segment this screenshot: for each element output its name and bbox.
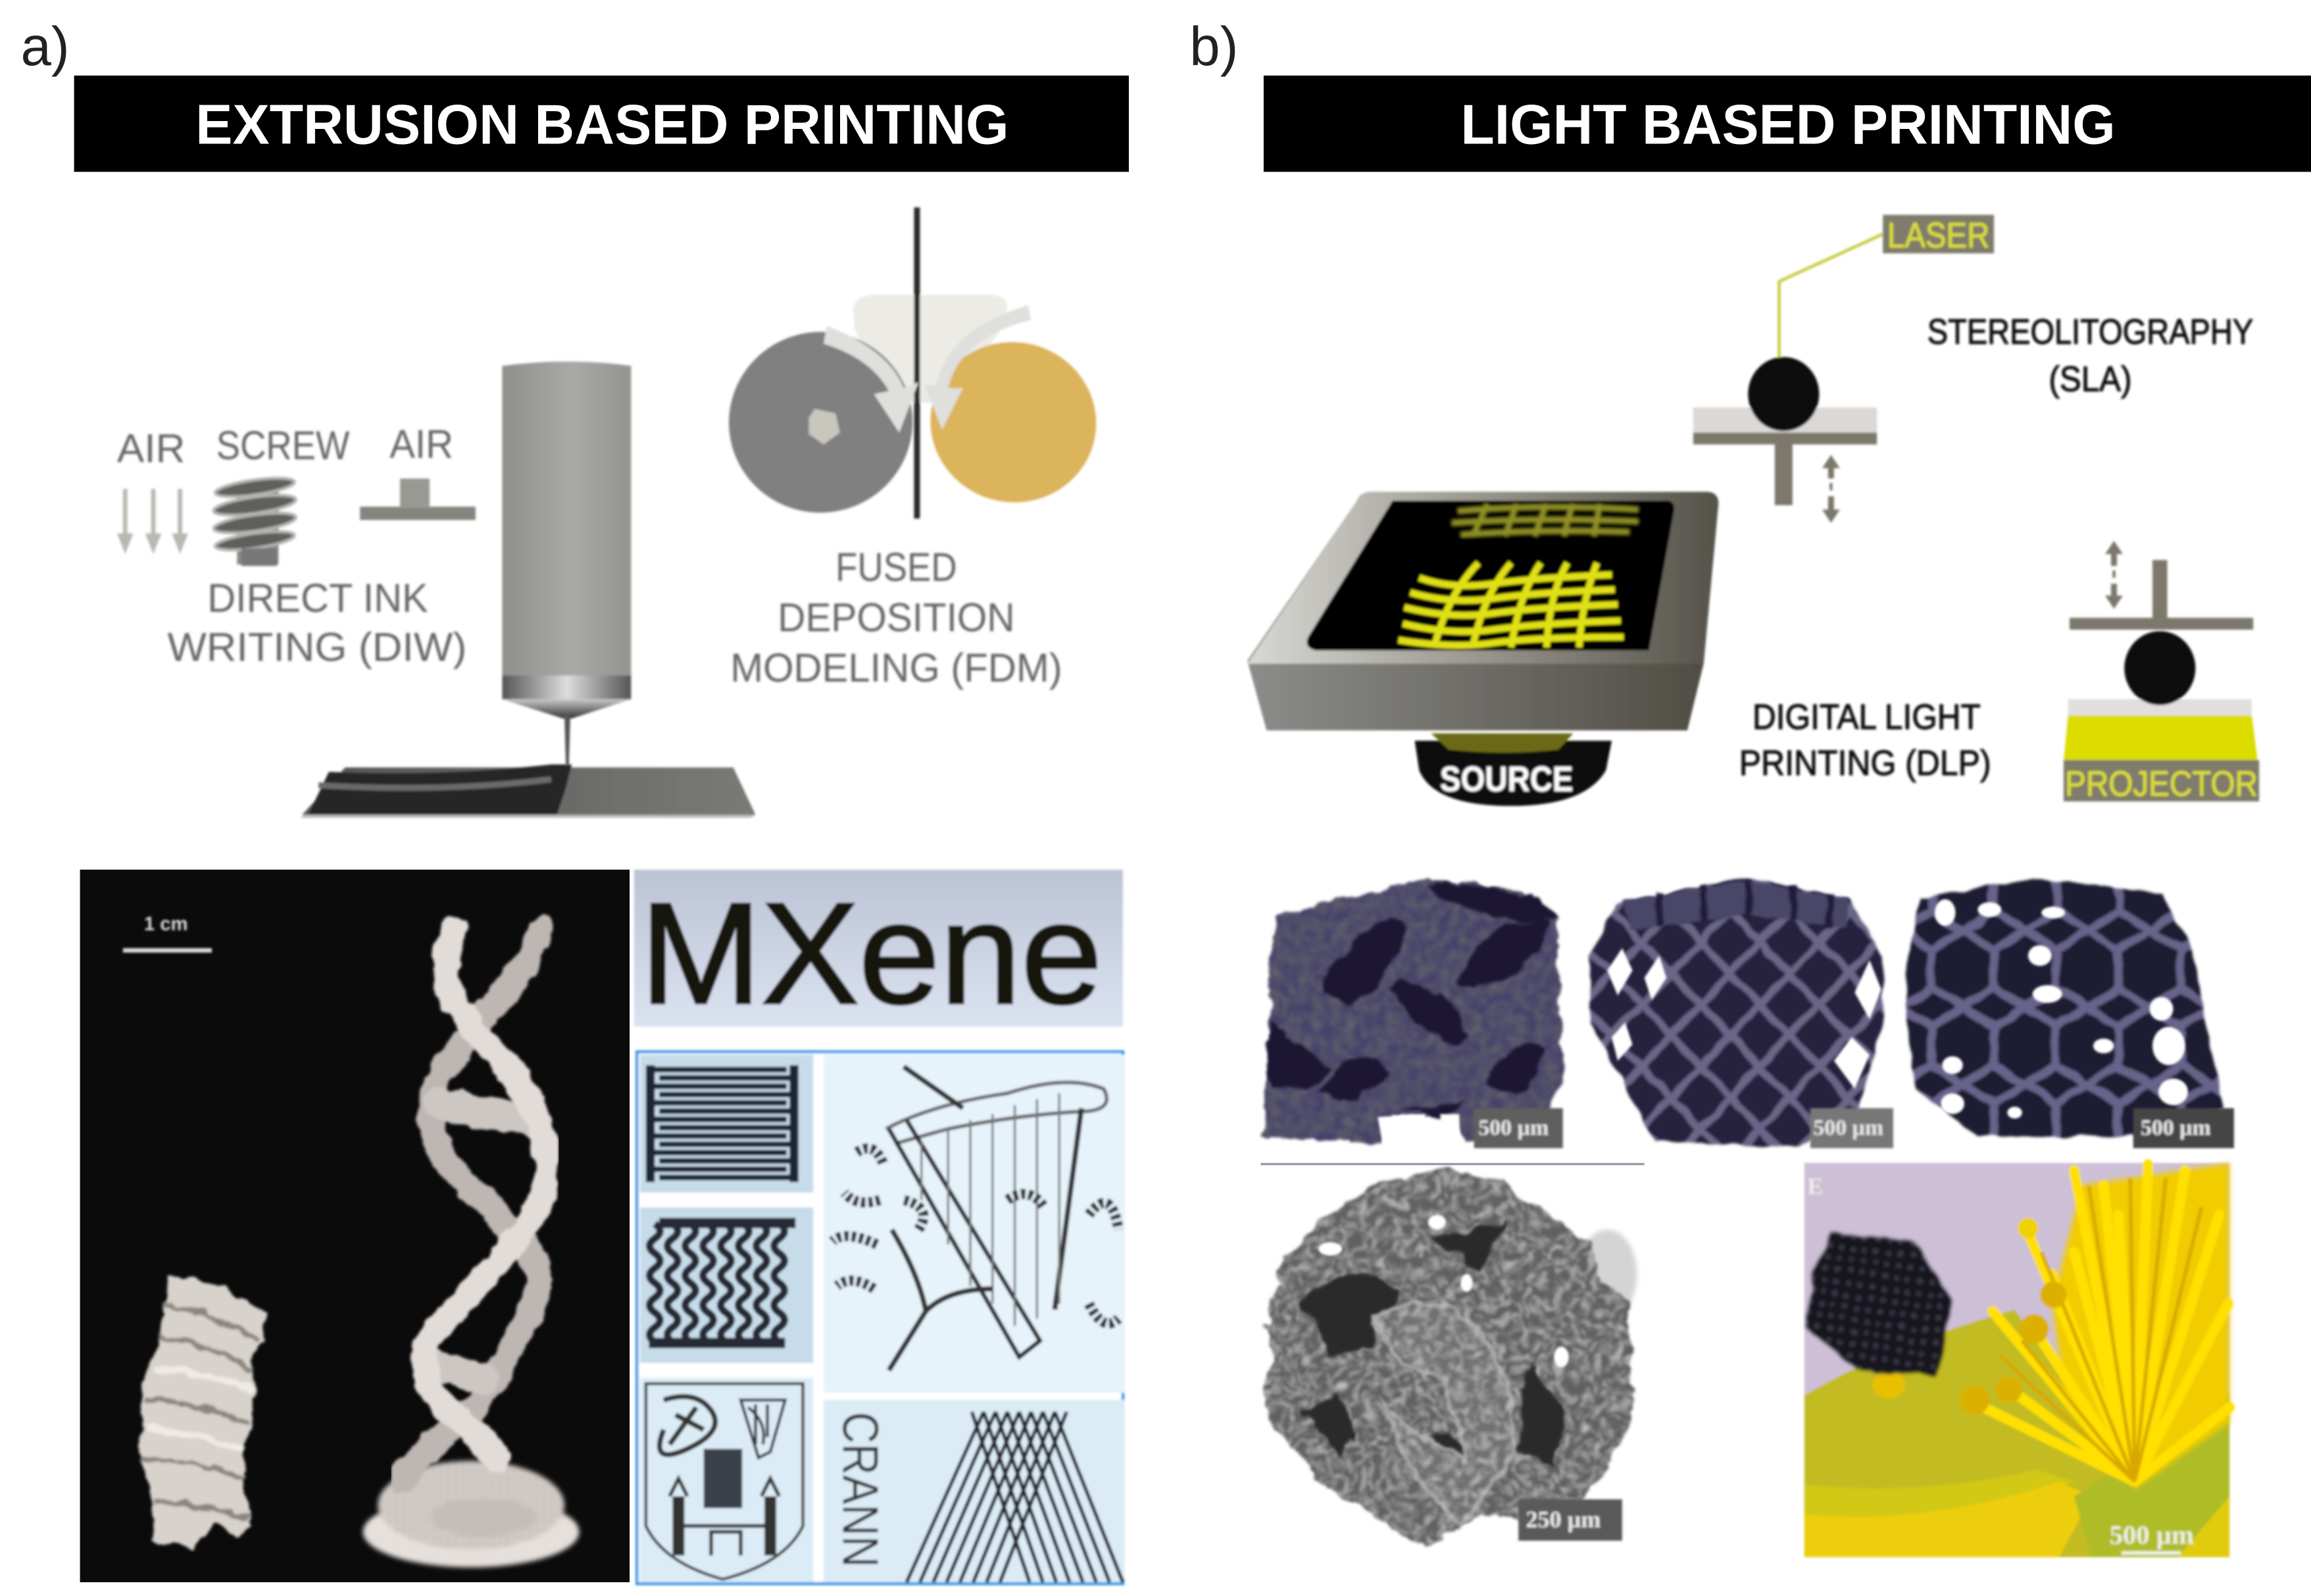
scale label: 500 µm <box>1810 1108 1893 1148</box>
label: direct ink writing: DIRECT INK <box>207 576 428 620</box>
micrograph: diamond lattice <box>1591 877 1893 1148</box>
icon: print plate with ink <box>301 764 755 818</box>
icon: resin vat <box>1247 492 1718 730</box>
panel: extrusion diagram <box>117 207 1111 818</box>
label: fused deposition modeling: MODELING (FDM) <box>730 645 1062 690</box>
scale label: 500 µm: 500 µm <box>1478 1116 1549 1140</box>
icon: anthers <box>1872 1218 2066 1415</box>
shape: background haze <box>1578 1230 1637 1318</box>
heading: extrusion based printing <box>74 76 1129 172</box>
photo: printed dna helix and vertebra <box>80 870 630 1582</box>
shape: gyroid pores <box>1271 886 1560 1118</box>
icon: reflected yellow grid <box>1452 504 1639 536</box>
label: digital light printing: DIGITAL LIGHT <box>1752 697 1981 737</box>
label: digital light printing <box>1739 697 1991 783</box>
panel: light based diagram <box>1247 215 2259 806</box>
icon: light source lens <box>1415 734 1612 806</box>
panel: printed MXene patterns <box>637 1052 1124 1584</box>
icon: dlp platform and projector: PROJECTOR <box>2065 764 2258 803</box>
icon: flower stamens <box>1977 1164 2229 1482</box>
scale label: 500 µm <box>1474 1108 1563 1148</box>
icon: sla motion arrows <box>1822 455 1840 523</box>
scale label: 500 µm: 500 µm <box>1813 1116 1883 1140</box>
icon: stamen shadows <box>2000 1178 2201 1482</box>
micrograph: hexagonal lattice <box>1905 878 2234 1148</box>
label: fused deposition modeling: DEPOSITION <box>778 595 1015 639</box>
heading: light based printing <box>1264 76 2311 172</box>
label: fused deposition modeling: FUSED <box>835 545 957 589</box>
icon: dlp platform and projector <box>2064 560 2259 803</box>
scale bar: 1 cm <box>123 914 212 953</box>
shape: top band <box>1622 880 1849 930</box>
shape: base gap <box>1378 1114 1460 1149</box>
label: source: SOURCE <box>1440 760 1574 799</box>
micrograph: gyroid lattice <box>1262 878 1564 1149</box>
icon: air nozzle <box>360 478 476 520</box>
pattern: CRANN text and crossing lines: CRANN <box>832 1412 887 1568</box>
icon: vertebra column <box>139 1274 266 1550</box>
pattern: wavy interdigitated lines <box>640 1207 813 1363</box>
pattern: coat of arms shield <box>640 1378 813 1582</box>
scale bar: 1 cm: 1 cm <box>144 914 188 935</box>
label: stereolitography: STEREOLITOGRAPHY <box>1927 312 2253 351</box>
label: stereolitography: (SLA) <box>2049 360 2132 399</box>
scale label: 500 µm: 500 µm <box>2110 1520 2194 1550</box>
pattern: harp with branches <box>824 1055 1124 1393</box>
image: MXene lettering: MXene <box>640 874 1102 1034</box>
panel label b): b) <box>1189 16 1238 77</box>
heading: light based printing: LIGHT BASED PRINTING <box>1460 93 2116 156</box>
label: E: E <box>1807 1173 1823 1199</box>
label: direct ink writing <box>167 576 466 669</box>
icon: air arrows <box>117 489 188 554</box>
icon: laser box and beam <box>1779 215 1994 360</box>
icon: dna helix <box>403 928 547 1478</box>
label: direct ink writing: WRITING (DIW) <box>167 624 466 669</box>
label: air right: AIR <box>389 422 453 466</box>
scale label: 500 µm: 500 µm <box>2141 1116 2211 1140</box>
scale label: 500 µm <box>2133 1108 2234 1148</box>
pattern: CRANN text and crossing lines <box>824 1400 1124 1582</box>
shape: gyroid body <box>1262 878 1564 1143</box>
shape: bright holes <box>1318 1215 1569 1368</box>
icon: dlp motion arrows <box>2105 541 2123 609</box>
shape: open pores <box>1607 948 1881 1089</box>
label: digital light printing: PRINTING (DLP) <box>1739 743 1991 783</box>
shape: open pores <box>1935 899 2188 1118</box>
icon: extruder cylinder <box>502 361 631 766</box>
label: screw: SCREW <box>216 423 350 468</box>
pattern: interdigitated comb <box>640 1055 813 1193</box>
icon: black lattice scaffold <box>1806 1233 1952 1376</box>
icon: screw <box>212 474 297 566</box>
shape: dark pores <box>1304 1222 1563 1482</box>
label: fused deposition modeling <box>730 545 1062 690</box>
shape: hexagon lattice body <box>1905 878 2224 1136</box>
shape: scaffold body <box>1262 1170 1633 1548</box>
icon: laser box and beam: LASER <box>1887 216 1989 255</box>
scale label: 250 µm <box>1518 1499 1622 1541</box>
shape: raised strut <box>1370 1304 1514 1526</box>
icon: sla platform <box>1693 357 1877 505</box>
icon: filament drive wheels <box>717 207 1111 524</box>
label: air left: AIR <box>117 426 185 471</box>
shape: frame line <box>1260 1163 1645 1165</box>
micrograph: grey SEM scaffold <box>1260 1163 1645 1548</box>
heading: extrusion based printing: EXTRUSION BASED PRINTING <box>195 93 1009 156</box>
scale label: 250 µm: 250 µm <box>1526 1507 1601 1533</box>
shape: diamond lattice body <box>1591 877 1883 1147</box>
icon: flower petals <box>1804 1163 2229 1557</box>
photo: scaffold on yellow flower <box>1804 1163 2229 1557</box>
icon: printed yellow grid <box>1399 563 1624 647</box>
icon: helix base <box>363 1460 580 1568</box>
label: stereolitography <box>1927 312 2253 399</box>
panel label a): a) <box>21 16 70 77</box>
